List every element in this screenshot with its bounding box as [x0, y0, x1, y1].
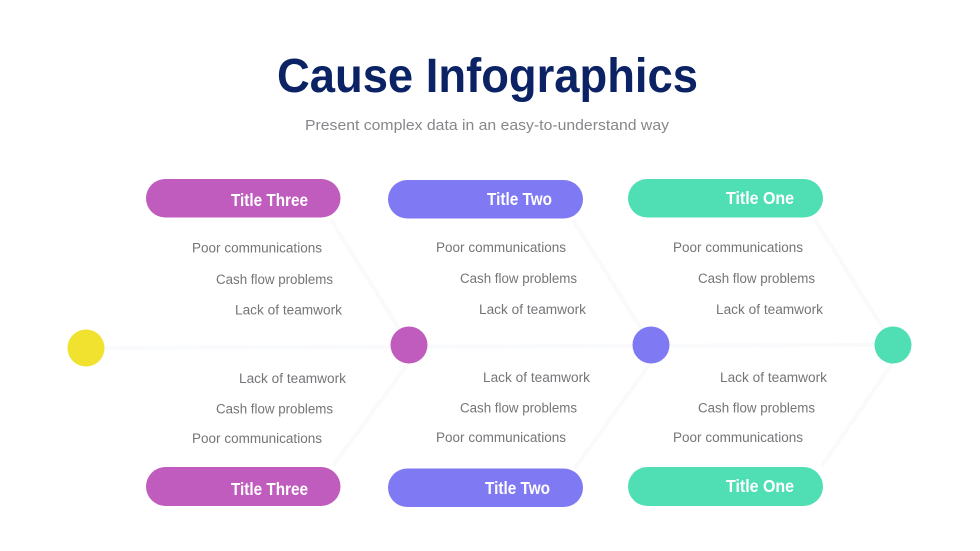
pill: title three top: Title Three	[231, 190, 308, 210]
causes: title one bottom: Lack of teamwork	[720, 370, 827, 385]
causes: title three bottom: Poor communications	[192, 431, 322, 446]
pill: title two top	[388, 180, 583, 218]
causes: title two top	[436, 240, 586, 317]
pill: title two top: Title Two	[487, 189, 552, 209]
node: title two	[632, 326, 670, 364]
causes: title one top	[673, 240, 823, 317]
node: title one	[874, 326, 912, 364]
causes: title two bottom: Poor communications	[436, 430, 566, 445]
subtitle: Present complex data in an easy-to-understand way	[305, 117, 670, 134]
start node	[68, 330, 104, 366]
fishbone spine and branches	[104, 220, 893, 468]
pill: title two bottom: Title Two	[485, 478, 550, 498]
causes: title three top	[192, 240, 342, 318]
pill: title one top	[628, 179, 823, 218]
causes: title one top: Poor communications	[673, 240, 803, 255]
causes: title three bottom	[192, 371, 346, 446]
causes: title one bottom: Cash flow problems	[698, 400, 815, 416]
pill: title one top: Title One	[726, 188, 794, 208]
causes: title three top: Lack of teamwork	[235, 302, 342, 318]
pill: title two bottom	[388, 468, 583, 507]
pill: title three bottom: Title Three	[231, 479, 308, 499]
causes: title two bottom	[436, 370, 590, 445]
causes: title one top: Cash flow problems	[698, 271, 815, 286]
causes: title two top: Cash flow problems	[460, 271, 577, 286]
causes: title three bottom: Lack of teamwork	[239, 371, 346, 386]
causes: title two top: Poor communications	[436, 240, 566, 255]
causes: title three top: Poor communications	[192, 240, 322, 256]
pill: title one bottom	[628, 467, 823, 506]
causes: title one bottom: Poor communications	[673, 430, 803, 445]
causes: title two bottom: Cash flow problems	[460, 400, 577, 416]
pill: title three bottom	[146, 467, 340, 506]
causes: title one bottom	[673, 370, 827, 445]
title: Cause Infographics	[277, 50, 698, 103]
causes: title three bottom: Cash flow problems	[216, 402, 333, 416]
causes: title two top: Lack of teamwork	[479, 302, 586, 317]
node: title three	[390, 326, 428, 364]
pill: title one bottom: Title One	[726, 476, 794, 496]
causes: title one top: Lack of teamwork	[716, 302, 823, 317]
causes: title three top: Cash flow problems	[216, 272, 333, 287]
causes: title two bottom: Lack of teamwork	[483, 370, 590, 385]
pill: title three top	[146, 179, 340, 218]
